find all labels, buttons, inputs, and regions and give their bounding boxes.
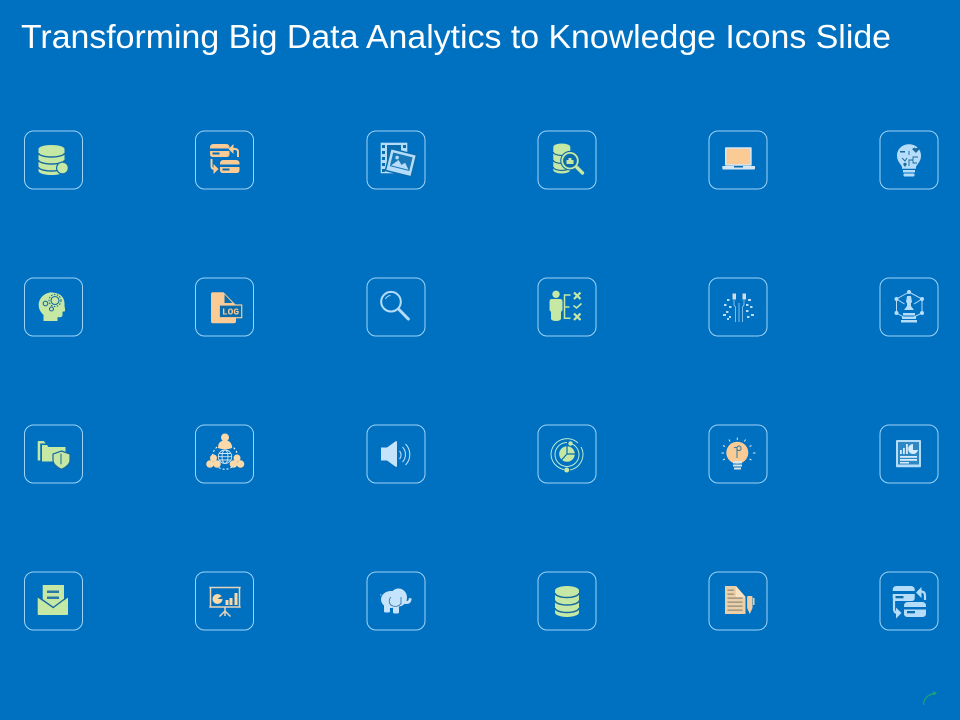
icon: log file: LOG	[222, 306, 239, 318]
icon: database search	[538, 131, 596, 189]
icon: laptop	[709, 131, 767, 189]
icon: magnifier	[367, 278, 425, 336]
icon: folder with shield	[24, 425, 82, 483]
icon: film and photo	[367, 131, 425, 189]
icon: document with pencil	[709, 572, 767, 630]
icon: puzzle bulb	[880, 131, 938, 189]
icon: speaker	[367, 425, 425, 483]
icon: head with gears	[24, 278, 82, 336]
title: Transforming Big Data Analytics to Knowledge Icons Slide	[21, 18, 891, 55]
icon: elephant	[367, 572, 425, 630]
icon: lightbulb with rays	[709, 425, 767, 483]
icon: orbit pie chart	[538, 425, 596, 483]
icon: presentation board	[196, 572, 254, 630]
icon: people around globe	[196, 425, 254, 483]
icon: person with choices	[538, 278, 596, 336]
arrow: curved corner arrow	[924, 691, 937, 705]
icon: circuit wires	[709, 278, 767, 336]
icon: database	[538, 572, 596, 630]
icon: tablet dashboard	[880, 425, 938, 483]
icon: card exchange light blue	[880, 572, 938, 630]
icon: network chess piece	[880, 278, 938, 336]
icon: database with badge	[24, 131, 82, 189]
icon: log file	[196, 278, 254, 336]
icon: open envelope	[24, 572, 82, 630]
icon: card exchange peach	[196, 131, 254, 189]
